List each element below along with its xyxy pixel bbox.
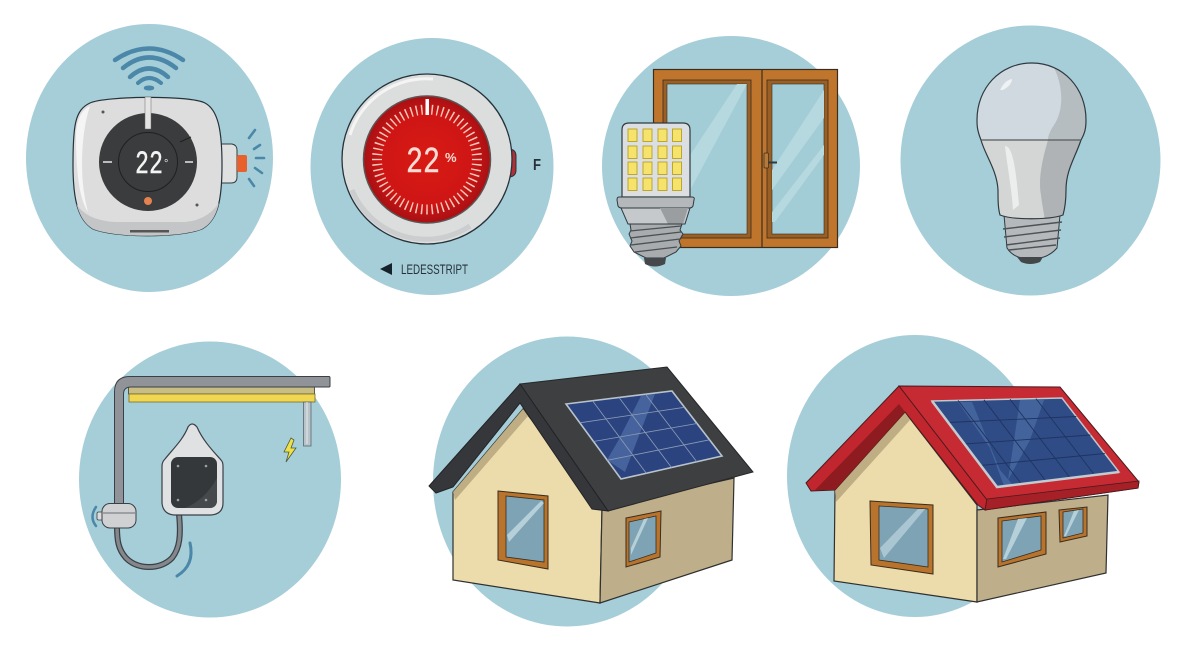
background circle [26,24,273,292]
side wall [600,478,734,603]
window handle [764,153,777,168]
signal rays [249,130,264,186]
hanging strip end [304,402,311,446]
panel: red dial thermostat [310,38,554,295]
eave shadow [835,412,910,502]
side window [626,511,661,567]
sensor cable [117,514,180,567]
background circle [310,38,554,295]
temperature reading: 22 [135,146,163,183]
background circle [602,36,860,296]
icon: wifi signal [115,48,183,90]
left glass pane [667,84,747,234]
panel: LED bulb [900,26,1160,296]
panel: house with dark roof and solar panels [429,336,753,626]
side window large [998,512,1046,567]
rail and downpipe [114,376,330,505]
panel: window and LED lamp [602,36,860,296]
indicator stem [145,97,151,129]
pipe clamp [97,504,136,528]
bulb screw base [1003,215,1062,264]
front window [870,501,933,574]
front wall [834,412,977,602]
lamp collar [617,197,694,208]
LED chips [628,129,682,190]
panel: smart thermostat [26,24,273,292]
strip label: LEDESSTRIPT [401,261,468,277]
main roof [899,386,1139,510]
yellow LED strip [128,386,315,402]
side wall [977,495,1108,602]
panel frame edge [932,401,1119,487]
side window small [1059,507,1087,542]
solar panel [566,391,722,479]
right glass pane [772,84,824,234]
gable roof [429,384,608,511]
lamp tip [644,258,666,266]
front wall [453,409,602,603]
LED lamp [617,123,694,266]
degree mark: ° [164,158,168,170]
window frame [654,69,838,248]
thermostat dial [99,113,197,211]
gable roof [806,386,987,510]
main roof [520,367,753,511]
side tab [510,149,516,177]
eave shadow [453,409,528,500]
icon: lightning bolt [284,438,296,462]
side button [221,144,247,183]
arrow icon [380,263,392,275]
background circle [79,342,341,618]
front window [498,491,548,569]
sensor unit [162,424,223,515]
panel: LED strip and sensor [79,342,341,618]
side label: F [533,157,541,174]
background circle [900,26,1160,296]
roof edge [985,481,1139,510]
lamp thread [629,224,683,258]
percentage reading: 22 [406,142,440,183]
background circle [787,335,1043,617]
background circle [433,336,701,626]
lamp body [622,123,690,197]
thermostat body [70,97,222,240]
panel: house with red roof and solar panels [787,335,1139,617]
red display [364,96,490,223]
percent sign: % [445,150,457,165]
bulb glass [976,62,1087,220]
vibration arcs [92,507,191,576]
gable underside [815,404,905,490]
dial ring [342,74,512,244]
solar panel [932,398,1119,487]
